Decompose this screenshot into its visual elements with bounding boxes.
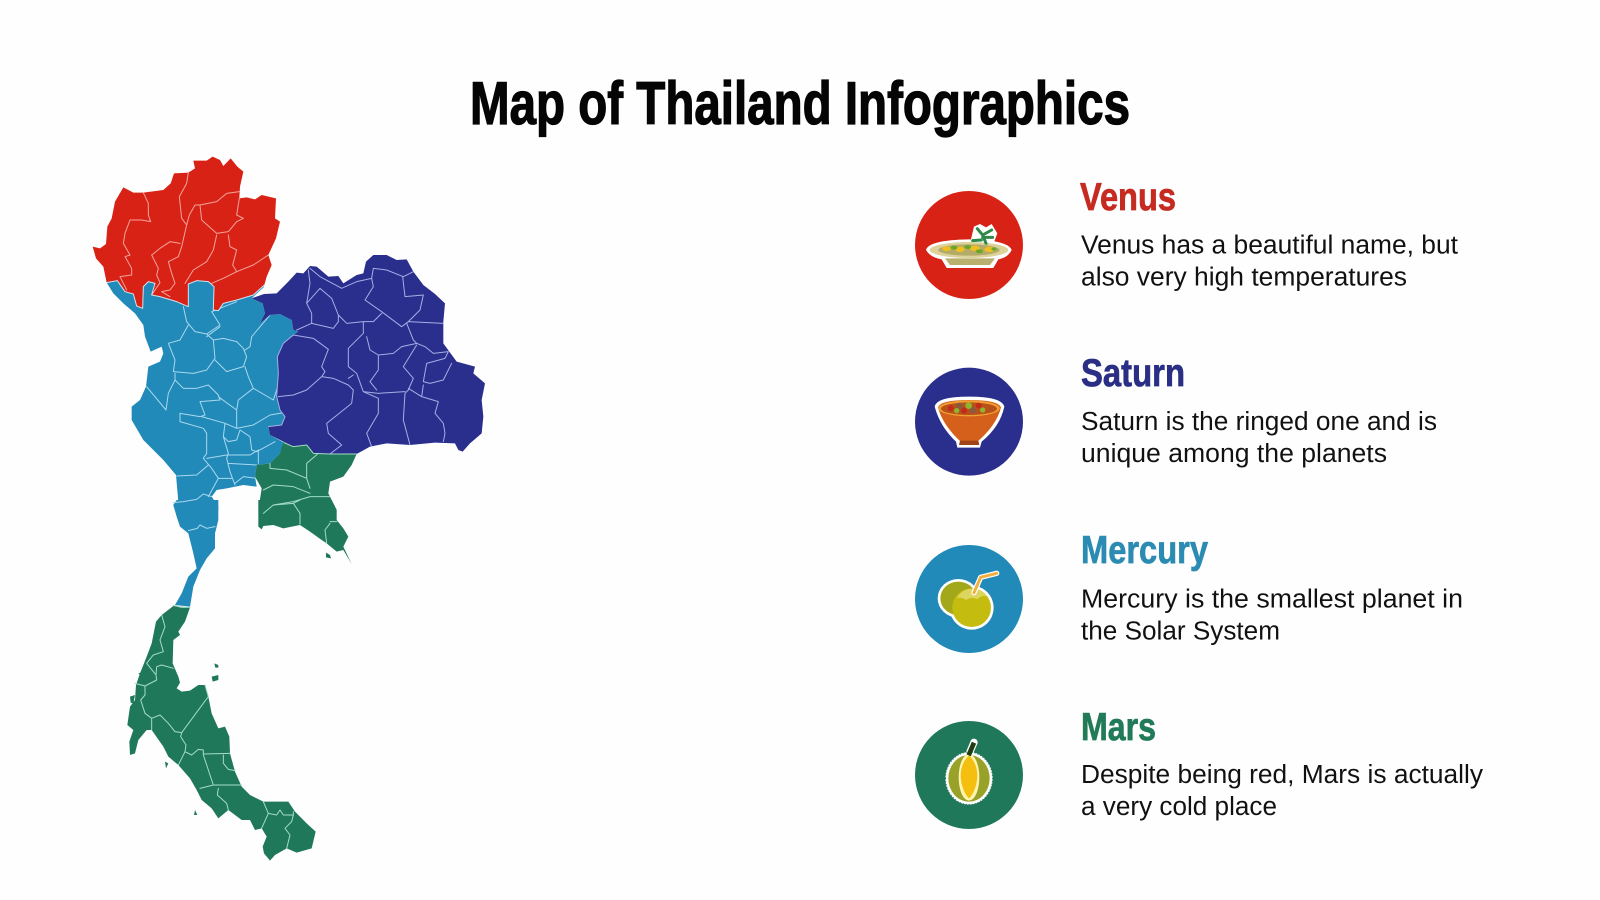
- region: north (red): [93, 157, 280, 311]
- text: Venus description: Venus has a beautiful name, but: [1081, 232, 1458, 260]
- heading: Mars: Mars: [1081, 706, 1156, 749]
- item: Venus: [915, 176, 1458, 299]
- item: Mercury: [915, 529, 1463, 653]
- text: Venus description: also very high temperatures: [1081, 264, 1407, 292]
- text: Saturn description: Saturn is the ringed one and is: [1081, 408, 1437, 436]
- south and east province borders: [263, 443, 357, 505]
- region: central (light blue): [107, 273, 298, 607]
- icon: durian on green circle: [915, 721, 1023, 829]
- text: Mercury description: the Solar System: [1081, 618, 1280, 646]
- heading: Venus: Venus: [1080, 176, 1176, 219]
- icon: soup bowl on navy circle: [915, 368, 1023, 476]
- region: east and south (green): [127, 442, 357, 861]
- item: Mars: [915, 706, 1483, 829]
- text: Saturn description: unique among the planets: [1081, 440, 1387, 468]
- icon: coconut on blue circle: [915, 545, 1023, 653]
- region: northeast (navy): [252, 255, 485, 454]
- map of Thailand: [93, 157, 485, 861]
- north province borders: [107, 173, 268, 311]
- text: Mercury description: Mercury is the smallest planet in: [1081, 586, 1463, 614]
- heading: Saturn: Saturn: [1081, 352, 1185, 395]
- northeast province borders: [268, 268, 452, 454]
- text: Mars description: Despite being red, Mars is actually: [1081, 761, 1483, 789]
- title: Map of Thailand Infographics: [470, 70, 1130, 137]
- icon: curry plate on red circle: [915, 191, 1023, 299]
- heading: Mercury: Mercury: [1081, 529, 1208, 572]
- central province borders: [147, 302, 284, 503]
- item: Saturn: [915, 352, 1437, 476]
- text: Mars description: a very cold place: [1081, 793, 1277, 821]
